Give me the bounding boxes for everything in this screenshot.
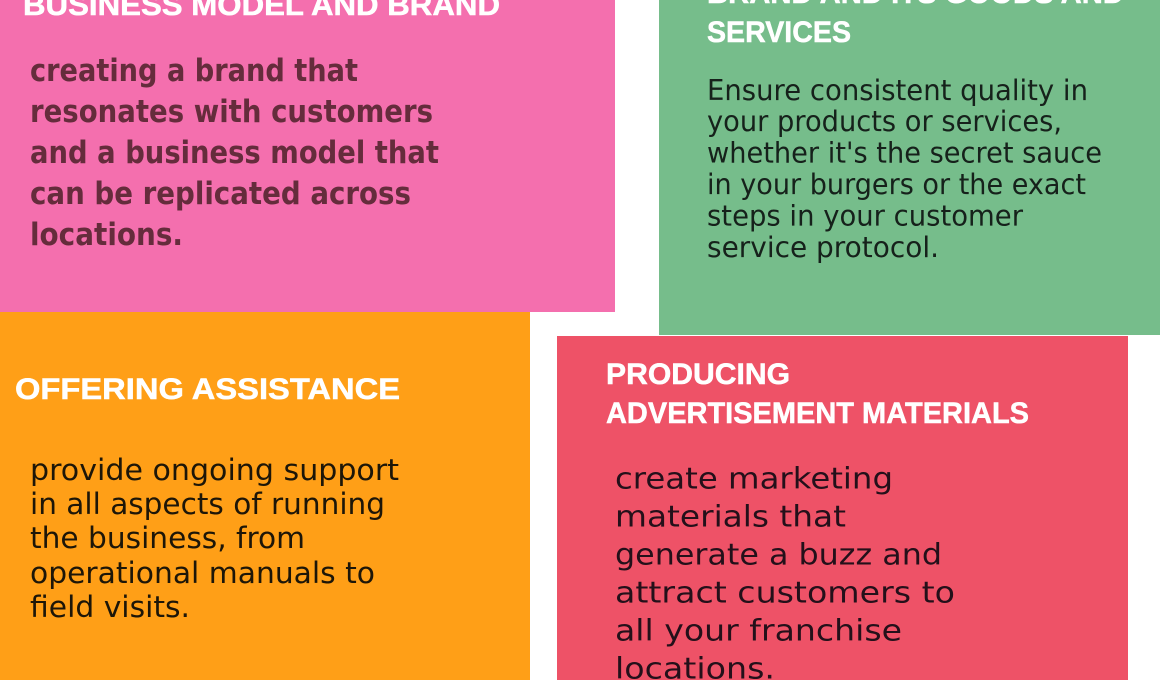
text block: consistent quality description: steps in your customer: [707, 200, 1023, 232]
text block: consistent quality description: Ensure consistent quality in: [707, 74, 1088, 107]
panel: brand and its goods and services: [659, 0, 1160, 335]
text block: ongoing support description: [30, 453, 399, 624]
text block: brand description: locations.: [30, 217, 183, 253]
text block: brand description: resonates with customers: [30, 94, 433, 130]
text block: marketing materials description: create marketing: [615, 462, 893, 496]
text block: brand description: creating a brand that: [30, 53, 358, 89]
text block: marketing materials description: all your franchise: [615, 614, 902, 648]
text block: brand description: and a business model that: [30, 135, 439, 171]
panel: producing advertisement materials: [557, 336, 1128, 680]
text block: consistent quality description: your products or services,: [707, 105, 1062, 138]
text block: consistent quality description: whether it's the secret sauce: [707, 136, 1102, 170]
heading: offering assistance: OFFERING ASSISTANCE: [15, 373, 400, 406]
heading: brand and its goods and services: SERVICES: [707, 16, 851, 49]
text block: ongoing support description: provide ongoing support: [30, 453, 399, 487]
heading: producing advertisement materials: [606, 358, 1029, 430]
panel: business model and brand: [0, 0, 615, 312]
text block: consistent quality description: [707, 74, 1102, 264]
text block: consistent quality description: service protocol.: [707, 231, 939, 264]
heading: brand and its goods and services: [707, 0, 1124, 49]
text block: ongoing support description: operational manuals to: [30, 556, 375, 590]
text block: brand description: can be replicated across: [30, 176, 411, 212]
text block: marketing materials description: [615, 462, 955, 680]
text block: marketing materials description: attract customers to: [615, 576, 955, 610]
text block: marketing materials description: materials that: [615, 500, 846, 534]
text block: consistent quality description: in your burgers or the exact: [707, 168, 1086, 201]
text block: ongoing support description: in all aspects of running: [30, 487, 385, 521]
heading: producing advertisement materials: PRODUCING: [606, 358, 790, 391]
text block: brand description: [30, 53, 439, 253]
text block: marketing materials description: generate a buzz and: [615, 538, 942, 572]
heading: producing advertisement materials: ADVERTISEMENT MATERIALS: [606, 397, 1029, 430]
text block: ongoing support description: the business, from: [30, 521, 305, 555]
text block: ongoing support description: field visits.: [30, 590, 190, 624]
panel: offering assistance: [0, 312, 530, 680]
